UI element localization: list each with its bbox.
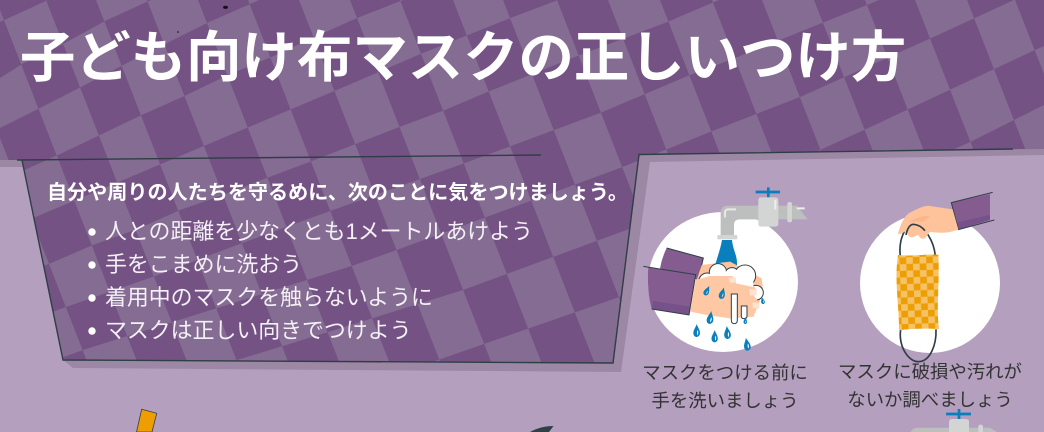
water drops	[702, 285, 712, 296]
strap over fingers	[906, 224, 925, 235]
sleeve	[952, 194, 990, 229]
caption: check mask	[838, 361, 1022, 410]
front sleeve	[648, 267, 696, 315]
bullet list: 着用中のマスクを触らないように	[105, 285, 433, 310]
caption: check mask: マスクに破損や汚れが	[838, 361, 1022, 382]
back sleeve	[660, 248, 703, 280]
hand	[898, 206, 958, 239]
panel drop shadow	[0, 160, 30, 167]
panel: hand washing illustration	[643, 187, 808, 352]
caption: check mask: ないか調べましょう	[847, 389, 1013, 410]
soap foam	[699, 264, 763, 300]
front hand	[690, 276, 759, 318]
white circle	[648, 212, 798, 352]
panel shadow strip	[63, 149, 1044, 372]
bullet list: マスクは正しい向きでつけよう	[105, 318, 411, 343]
bullet list: 人との距離を少なくとも1メートルあけよう	[105, 219, 533, 244]
icon: faucet	[717, 187, 808, 239]
icon: next faucet, cropped by edge	[911, 409, 997, 432]
bullet list	[88, 219, 533, 343]
panel: mask inspection illustration	[860, 192, 1000, 362]
icon: orange item, cropped by edge	[136, 409, 157, 432]
caption: wash hands	[642, 362, 808, 411]
soap drips	[731, 294, 747, 324]
ear loops	[900, 224, 936, 362]
icon: hand holding mask	[896, 192, 994, 362]
fabric mask	[896, 255, 939, 330]
caption: wash hands: マスクをつける前に	[642, 362, 808, 383]
panel outline strokes	[17, 149, 1013, 363]
white circle	[860, 213, 1000, 353]
bullet list: 手をこまめに洗おう	[105, 252, 302, 277]
panel: precautions text	[47, 181, 628, 343]
icon: washing hands	[643, 248, 765, 351]
ink specks	[177, 6, 228, 33]
title: 子ども向け布マスクの正しいつけ方	[20, 26, 906, 88]
caption: wash hands: 手を洗いましょう	[651, 390, 799, 411]
intro sentence: 自分や周りの人たちを守るめに、次のことに気をつけましょう。	[47, 181, 628, 204]
back hand	[697, 262, 763, 315]
water stream	[714, 240, 737, 272]
icon: dark item, cropped by edge	[530, 426, 554, 432]
